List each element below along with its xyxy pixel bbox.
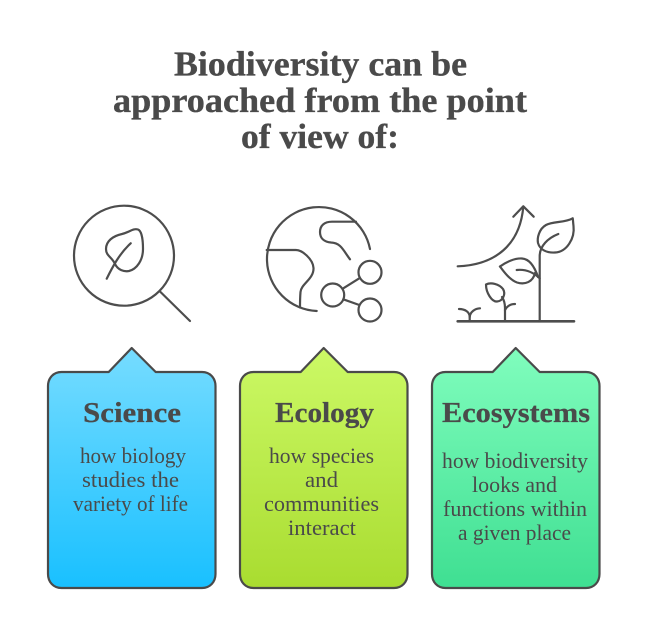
panel: Ecology — [240, 348, 408, 588]
heading: Ecosystems: Ecosystems — [442, 398, 590, 429]
text: Ecology description: how species — [269, 443, 374, 468]
icon: growing plants with rising arrow — [458, 206, 574, 321]
icon: magnifying glass with leaf — [74, 206, 190, 321]
text: Ecology description: and — [305, 467, 338, 492]
panel: Science — [48, 348, 216, 588]
text: Science description — [73, 443, 188, 516]
text: Ecosystems description: how biodiversity — [442, 448, 588, 473]
card shape: Ecology — [240, 348, 408, 588]
text: Ecosystems description: a given place — [458, 520, 571, 545]
text: Ecosystems description — [442, 448, 588, 545]
text: Science description: variety of life — [73, 491, 188, 516]
title: approached from the point — [113, 81, 527, 120]
title: of view of: — [241, 117, 399, 156]
text: Science description: studies the — [82, 467, 179, 492]
title: Biodiversity can be — [174, 44, 467, 84]
text: Ecology description: communities — [264, 491, 379, 516]
panel: Ecosystems — [432, 348, 600, 588]
heading: Ecology: Ecology — [275, 398, 374, 429]
title — [113, 44, 527, 156]
heading: Science: Science — [83, 398, 181, 429]
icon: globe with network nodes — [267, 207, 382, 322]
text: Ecology description — [264, 443, 379, 540]
text: Ecology description: interact — [288, 515, 356, 540]
text: Science description: how biology — [80, 443, 186, 468]
card shape: Science — [48, 348, 216, 588]
card shape: Ecosystems — [432, 348, 600, 588]
text: Ecosystems description: looks and — [472, 472, 557, 497]
text: Ecosystems description: functions within — [443, 496, 587, 521]
